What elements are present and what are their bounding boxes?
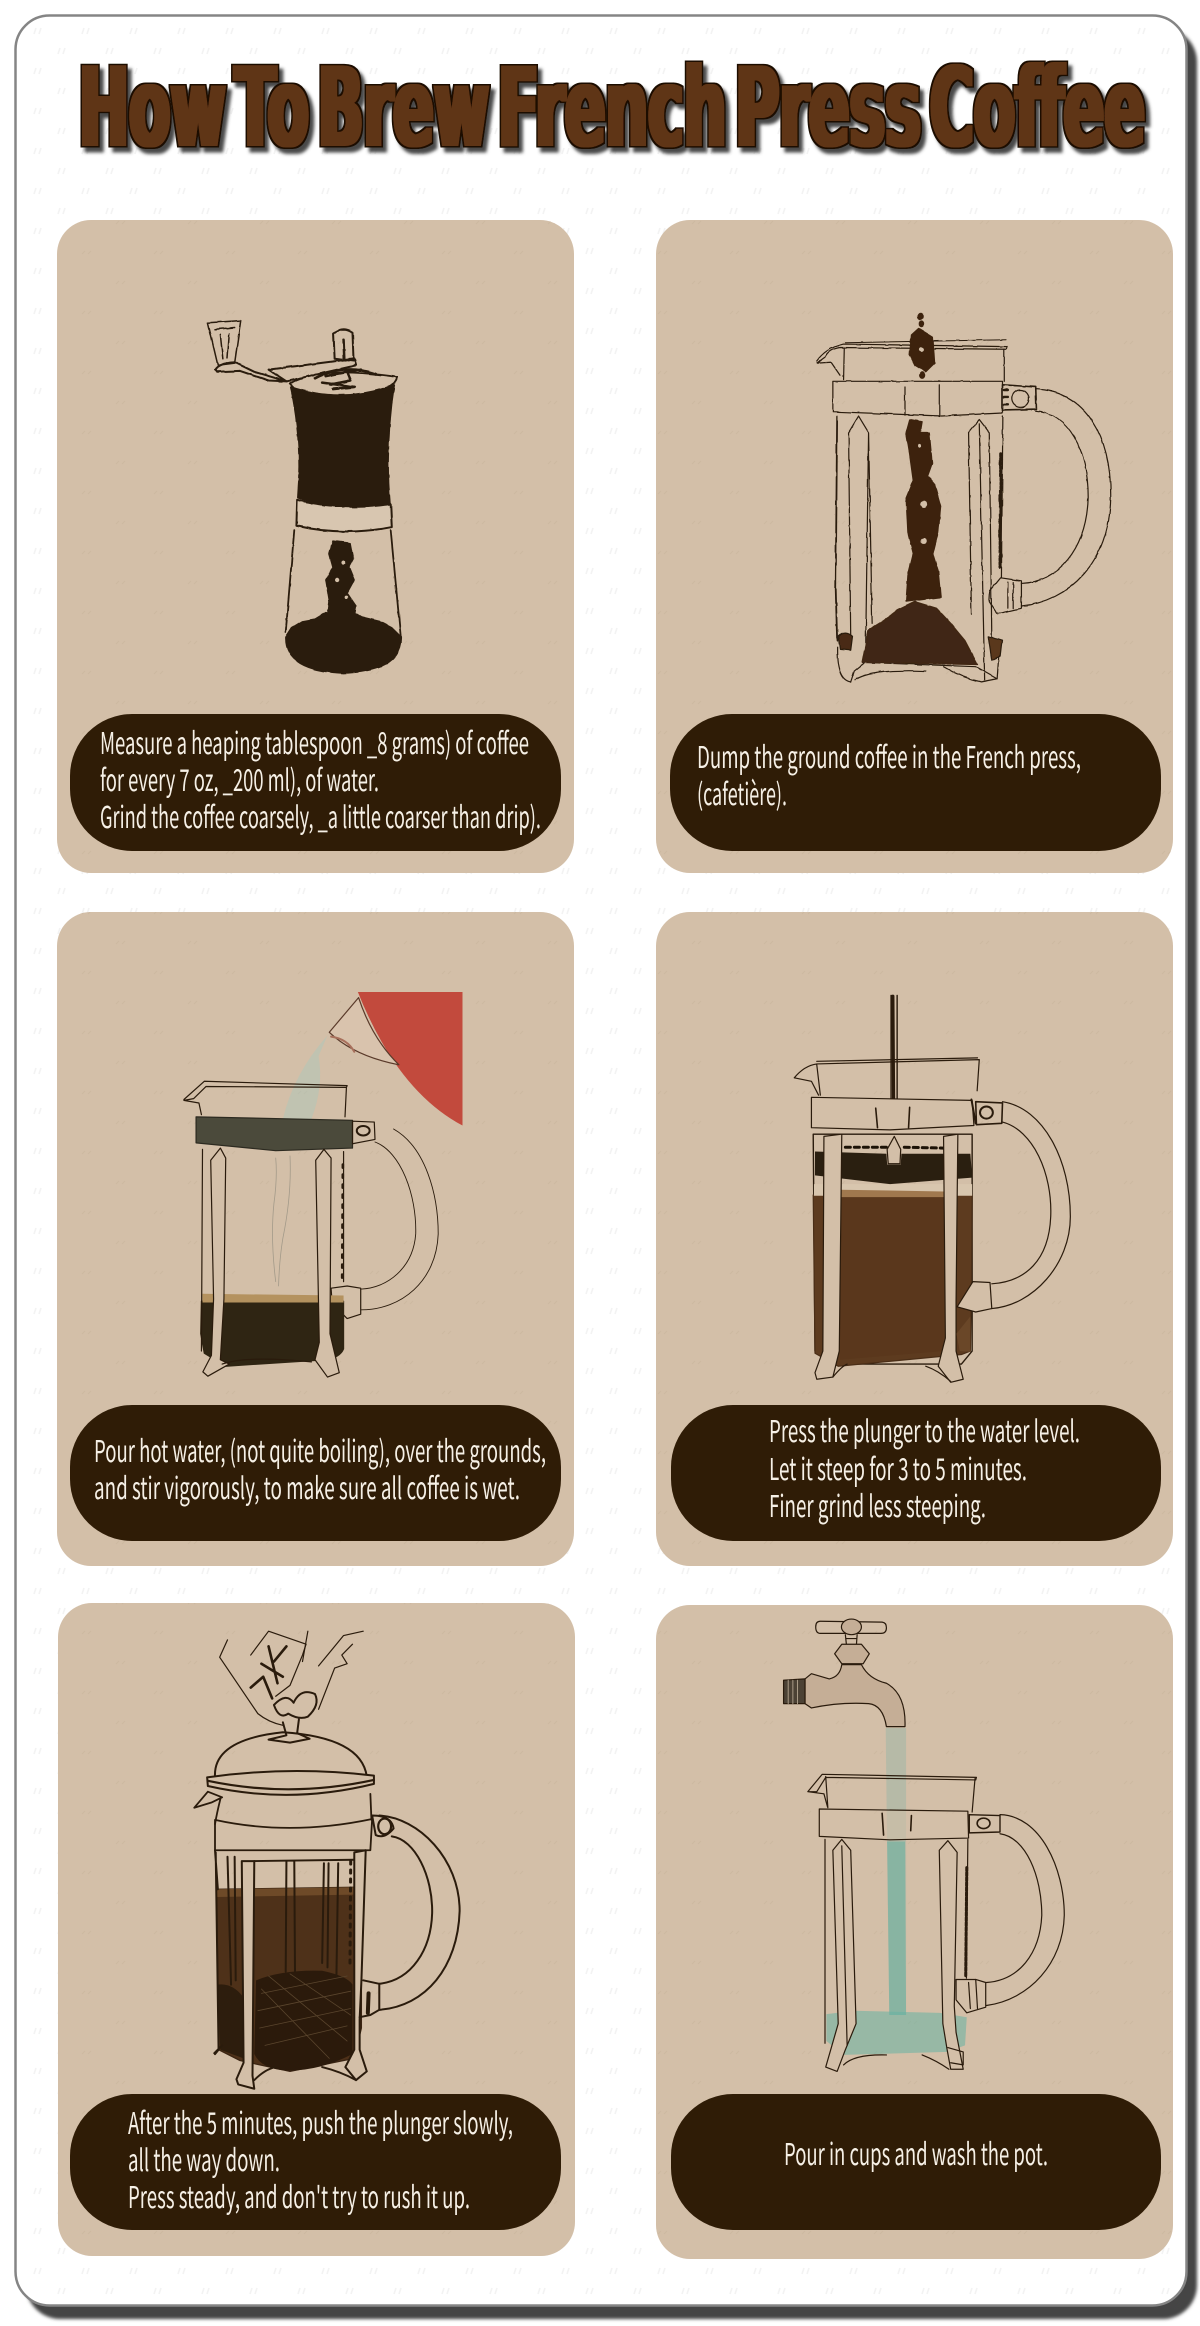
caption pill: for every 7 oz, _200 ml), of water. <box>100 756 379 800</box>
caption pill: all the way down. <box>128 2136 280 2180</box>
caption pill <box>671 1405 1161 1541</box>
panel: step 4 steep <box>656 912 1173 1566</box>
caption pill: (cafetière). <box>697 770 787 814</box>
caption pill: Grind the coffee coarsely, _a little coarser than drip). <box>100 793 541 837</box>
caption pill: and stir vigorously, to make sure all coffee is wet. <box>94 1464 520 1508</box>
caption pill: Finer grind less steeping. <box>769 1482 986 1526</box>
caption pill: Let it steep for 3 to 5 minutes. <box>769 1445 1027 1489</box>
panel: step 1 grind <box>57 220 574 873</box>
icon: french press with falling grounds <box>817 313 1111 682</box>
panel: step 6 wash <box>656 1605 1173 2259</box>
kettle <box>329 992 462 1126</box>
caption pill: Press steady, and don't try to rush it up. <box>128 2173 470 2217</box>
caption pill <box>70 714 561 851</box>
caption pill <box>671 2094 1161 2230</box>
caption pill <box>70 2094 561 2230</box>
water stream <box>283 1035 327 1119</box>
caption pill: Pour hot water, (not quite boiling), over the grounds, <box>94 1427 546 1471</box>
caption pill: Pour in cups and wash the pot. <box>784 2130 1048 2174</box>
icon: french press steeping <box>794 995 1070 1382</box>
icon: kettle and french press <box>184 992 462 1377</box>
panel: step 5 plunge <box>58 1603 575 2256</box>
caption pill: After the 5 minutes, push the plunger slowly, <box>128 2099 513 2143</box>
caption pill <box>670 714 1161 851</box>
icon: tap pouring water into french press <box>784 1619 1064 2071</box>
icon: coffee grinder <box>208 321 401 673</box>
caption pill <box>70 1405 561 1541</box>
icon: french press with hands pushing plunger <box>194 1631 460 2089</box>
panel: step 3 pour water <box>57 912 574 1566</box>
panel: step 2 dump grounds <box>656 220 1173 873</box>
caption pill: Measure a heaping tablespoon _8 grams) of coffee <box>100 719 529 763</box>
